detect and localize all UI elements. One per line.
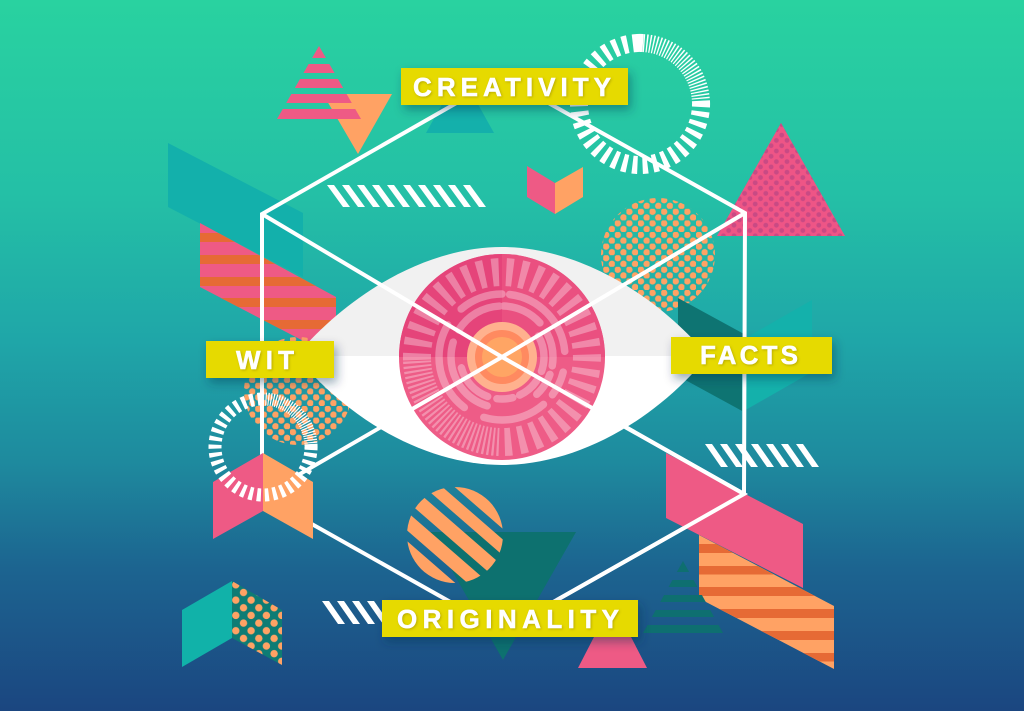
iris ring arcs [439,294,565,420]
icon: orange striped circle [407,487,503,583]
icon: pink striped triangle [277,46,361,119]
iris pupil [467,322,537,392]
icon: white hatch bottom left [322,601,390,624]
icon: iris [399,254,605,460]
label: facts: FACTS [700,340,798,370]
label: wit: WIT [236,345,294,375]
icon: dotted orange circle left [244,337,352,445]
icon: white hatch top [327,185,486,207]
icon: teal parallelogram left [168,143,303,277]
hexagon outline [262,77,745,631]
iris outer coarse bars [417,272,587,442]
icon: teal triangle behind creativity [426,72,494,133]
icon: pink triangle bottom [578,601,647,668]
icon: pink striped parallelogram [200,223,336,341]
icon: green striped triangle [640,561,726,633]
icon: pink and orange box left [213,453,313,539]
label: creativity: CREATIVITY [413,72,611,102]
icon: dotted pink triangle [717,123,845,236]
icon: pink parallelogram right [666,453,803,588]
iris outer fine bars [417,360,499,442]
icon: green inverted triangle [430,532,576,660]
label: originality: ORIGINALITY [397,604,619,634]
icon: white hatch right [705,444,819,467]
icon: orange striped parallelogram [699,535,834,669]
icon: dashed ring top right [579,43,701,165]
label: wit [206,341,334,378]
icon: small pink and orange box [527,166,583,214]
icon: dark green and teal chevron [678,298,812,412]
label: facts [671,337,832,374]
hexagon bottom right segments over pink [557,427,744,600]
icon: orange inverted triangle [323,94,392,154]
icon: eye [296,247,708,465]
icon: dashed ring left [215,399,311,495]
icon: teal and dotted box [182,581,282,667]
icon: dotted orange circle top [601,198,715,312]
